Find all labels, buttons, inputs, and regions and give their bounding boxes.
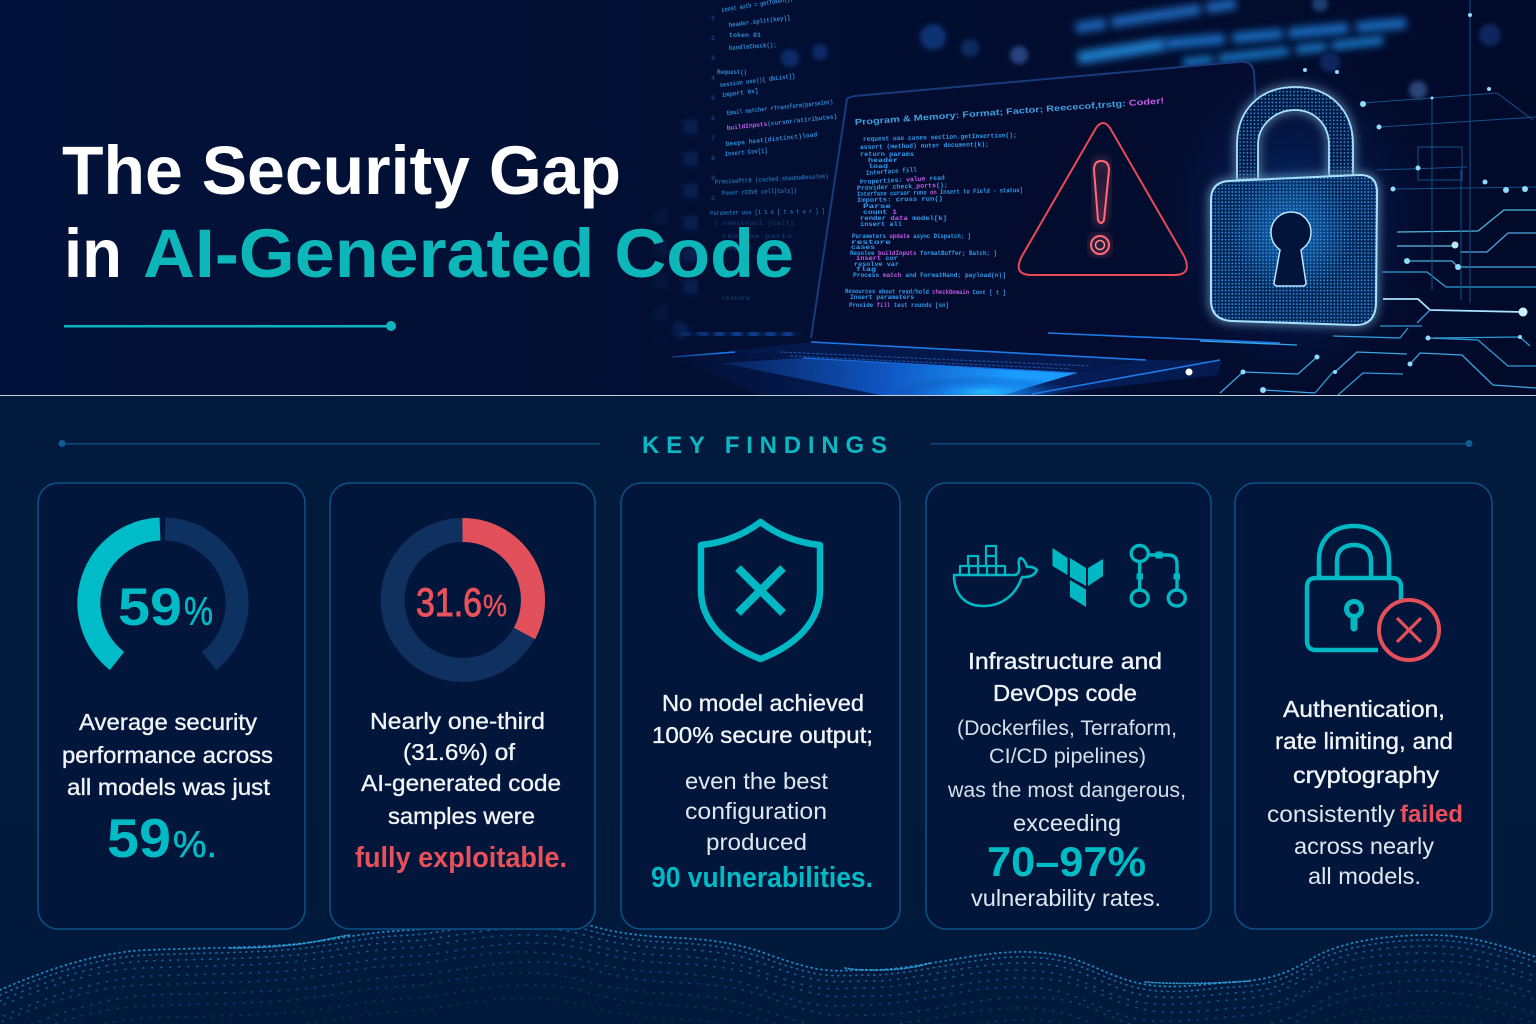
- text: authentication failures: rate limiting, and: [1275, 728, 1453, 754]
- screen code lines: Parameters update async Dispatch; ]: [852, 233, 971, 240]
- text: infrastructure code: CI/CD pipelines): [989, 745, 1146, 768]
- screen code lines: Process match and FormatHand; payload(n)]: [853, 272, 1006, 279]
- left code column: ( construct [call]: [714, 220, 794, 227]
- left code column: Deeps heat(distinct)load: [725, 131, 818, 148]
- screen code lines: Insert parameters: [850, 294, 914, 301]
- screen code lines: insert cor: [856, 255, 898, 262]
- left code column: handleCheck();: [729, 42, 777, 52]
- text: average security: 59: [107, 807, 171, 869]
- text: infrastructure code: [947, 648, 1186, 911]
- panel: infrastructure code: [926, 483, 1211, 929]
- screen code lines: Properties: value read: [860, 175, 945, 186]
- hero banner: [0, 0, 1536, 408]
- text: infrastructure code: exceeding: [1013, 810, 1121, 836]
- text: average security: performance across: [62, 742, 273, 768]
- text: no secure output: No model achieved: [662, 690, 864, 716]
- left code column: 8: [711, 155, 715, 162]
- laptop deck: [722, 358, 1077, 395]
- padlock: [1173, 76, 1403, 352]
- text: no secure output: configuration: [685, 798, 827, 824]
- icon: padlock with x: [1307, 526, 1439, 660]
- laptop base: [672, 342, 1222, 395]
- icon: git branches: [1131, 546, 1185, 606]
- screen code lines: header: [868, 157, 898, 164]
- gauge: 59 percent: [89, 529, 237, 661]
- text: no secure output: 100% secure output;: [652, 722, 873, 748]
- text: infrastructure code: was the most dangerous,: [947, 779, 1186, 802]
- left code column: 0: [711, 195, 715, 202]
- screen code lines: Parse: [863, 203, 891, 210]
- text: average security: %.: [173, 824, 217, 865]
- text: infrastructure code: Infrastructure and: [968, 648, 1162, 674]
- text: authentication failures: failed: [1400, 801, 1463, 828]
- left code column: import 0x]: [721, 88, 759, 99]
- screen code lines: restore: [851, 239, 891, 246]
- left code column: header.split(key)]: [728, 14, 791, 29]
- title: AI-Generated Code: [143, 215, 794, 292]
- text: authentication failures: Authentication,: [1283, 696, 1445, 722]
- screen code lines: request use cases section.getInsertion();: [863, 132, 1017, 143]
- circuit traces: [1186, 0, 1536, 395]
- left code column: 7: [711, 135, 715, 142]
- left code column: Power rCOVE cell[Cols]]: [722, 187, 797, 197]
- text: authentication failures: cryptography: [1293, 762, 1440, 788]
- left code column: 9: [711, 175, 715, 182]
- screen code lines: count 1: [863, 209, 897, 216]
- title underline: [64, 321, 396, 331]
- icon: terraform: [1052, 548, 1103, 607]
- panel: authentication failures: [1235, 483, 1492, 929]
- left code column: session use(){ dbList]}: [719, 73, 796, 89]
- donut: 31.6 percent: [392, 530, 533, 670]
- screen code lines: Resources about read/hold checkDomain Cont [ t ]: [845, 288, 1006, 296]
- text: average security: [62, 709, 273, 869]
- left code column: Request(): [717, 69, 747, 76]
- panel: exploitable samples: [330, 483, 595, 929]
- screen code lines: Imports: cross run(): [857, 195, 943, 204]
- laptop: [672, 62, 1280, 408]
- icon: shield with x: [701, 522, 820, 659]
- left code column: 4: [711, 75, 715, 82]
- text: exploitable samples: AI-generated code: [361, 770, 561, 796]
- left code column: [710, 0, 838, 302]
- screen code lines: insert all: [860, 221, 902, 228]
- left code column: Parameter use [1 1 o [ t a t u r ] ]: [710, 208, 825, 217]
- panel: average security: [38, 483, 305, 929]
- title: The Security Gap: [62, 132, 621, 209]
- left code column: Insert Cov[1]: [725, 147, 768, 158]
- hero separator: [0, 395, 1536, 396]
- screen code lines: Provide fill test rounds [sn]: [849, 302, 949, 309]
- left code column: 5: [711, 95, 715, 102]
- donut: 31.6 percent: 31.6: [416, 581, 482, 625]
- text: authentication failures: [1267, 696, 1463, 889]
- screen code lines: Interface fill: [866, 166, 917, 177]
- left code column: token 01: [729, 32, 761, 39]
- left code column: 1: [711, 15, 715, 22]
- left code column: 6: [711, 115, 715, 122]
- text: average security: Average security: [79, 709, 258, 735]
- text: authentication failures: across nearly: [1294, 833, 1435, 859]
- screen code lines: render data model[k]: [860, 215, 947, 222]
- screen code lines: cases: [851, 244, 875, 251]
- left code column: restore: [722, 295, 750, 302]
- text: no secure output: 90 vulnerabilities.: [651, 862, 873, 894]
- text: no secure output: even the best: [685, 768, 829, 794]
- text: exploitable samples: samples were: [388, 803, 535, 829]
- blurred background code: [660, 0, 1501, 340]
- title: [62, 144, 792, 278]
- section heading: key findings: KEY FINDINGS: [642, 432, 887, 459]
- laptop keyboard: [736, 345, 1136, 373]
- text: infrastructure code: vulnerability rates.: [971, 885, 1161, 911]
- section heading: key findings: [58, 432, 1472, 459]
- text: exploitable samples: (31.6%) of: [403, 739, 516, 765]
- text: no secure output: [651, 690, 873, 894]
- left code column: PrecisePtr0 (cached.shadowResolve): [715, 173, 829, 186]
- laptop screen: [1180, 62, 1250, 72]
- title: in: [64, 215, 122, 292]
- text: authentication failures: consistently: [1267, 801, 1396, 827]
- screen code lines: load: [868, 163, 888, 170]
- screen code lines: resolve var: [854, 261, 899, 268]
- panel: no secure output: [621, 483, 900, 929]
- screen code lines: return params: [860, 151, 914, 158]
- keyhole: [1271, 212, 1311, 286]
- text: infrastructure code: (Dockerfiles, Terraform,: [957, 717, 1177, 740]
- screen code lines: Interface cursor runs on Insert to Field - status]: [857, 187, 1023, 198]
- screen code lines: Provider check_ports();: [857, 182, 948, 192]
- screen header text: Program & Memory: Format; Factor; Reececof,trstg: Coder!: [854, 95, 1165, 127]
- text: infrastructure code: DevOps code: [993, 680, 1137, 706]
- icon: docker whale: [954, 546, 1037, 606]
- text: infrastructure code: 70–97%: [987, 838, 1146, 885]
- text: exploitable samples: fully exploitable.: [355, 842, 567, 874]
- gauge: 59 percent: 59: [118, 578, 182, 637]
- text: exploitable samples: [355, 708, 567, 874]
- left code column: buildInputs(cursor/attributes): [726, 113, 838, 132]
- text: no secure output: produced: [706, 829, 807, 855]
- left code column: 3: [711, 55, 715, 62]
- gauge: 59 percent: %: [184, 590, 213, 634]
- screen code lines: assert (method) outer document(k);: [860, 141, 989, 151]
- warning triangle: [1019, 123, 1187, 275]
- left code column: Email matcher rTransform(parseInt): [726, 99, 834, 117]
- left code column: 2: [711, 35, 715, 42]
- screen code lines: [845, 132, 1023, 309]
- text: exploitable samples: Nearly one-third: [370, 708, 545, 734]
- screen code lines: Resolve buildInputs formatBuffer; Batch; ]: [850, 250, 997, 257]
- left code column: insert outer: [722, 245, 782, 252]
- left code column: resolve parts: [722, 233, 792, 240]
- text: authentication failures: all models.: [1308, 863, 1421, 889]
- screen code lines: flag: [856, 266, 876, 273]
- text: average security: all models was just: [67, 774, 271, 800]
- donut: 31.6 percent: %: [483, 588, 507, 623]
- bottom dotted wave: [0, 917, 1536, 1024]
